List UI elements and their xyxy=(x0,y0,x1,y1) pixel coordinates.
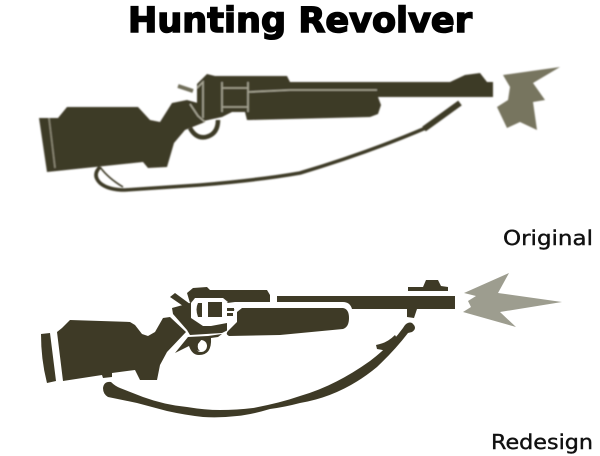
redesign sling xyxy=(103,323,415,417)
original buttplate line xyxy=(49,118,55,168)
label: original: Original xyxy=(503,226,593,250)
redesign trigger guard xyxy=(175,334,222,355)
redesign front sight xyxy=(408,280,448,291)
redesigned rifle illustration xyxy=(41,280,455,417)
original trigger guard xyxy=(190,120,218,137)
redesign sling mount xyxy=(407,309,417,318)
redesign frame top xyxy=(187,287,270,303)
redesign revolver lower frame xyxy=(172,298,235,335)
redesign stock xyxy=(57,317,186,381)
redesign buttplate xyxy=(41,333,56,383)
original flash xyxy=(497,67,560,130)
original hammer xyxy=(178,86,193,91)
redesign barrel xyxy=(277,296,455,309)
original cylinder details xyxy=(190,82,377,122)
label: redesign: Redesign xyxy=(491,430,593,454)
original sling xyxy=(96,127,428,190)
redesign muzzle flash xyxy=(463,273,562,327)
redesign sling branch xyxy=(376,335,398,351)
original front sight xyxy=(450,73,487,82)
original stock xyxy=(39,100,205,172)
redesign handguard xyxy=(227,308,349,336)
original revolver frame and barrel xyxy=(197,74,493,122)
original rifle illustration xyxy=(39,67,560,190)
title: Hunting Revolver xyxy=(128,1,473,41)
redesign hammer xyxy=(170,293,190,308)
redesign cylinder xyxy=(191,298,238,333)
